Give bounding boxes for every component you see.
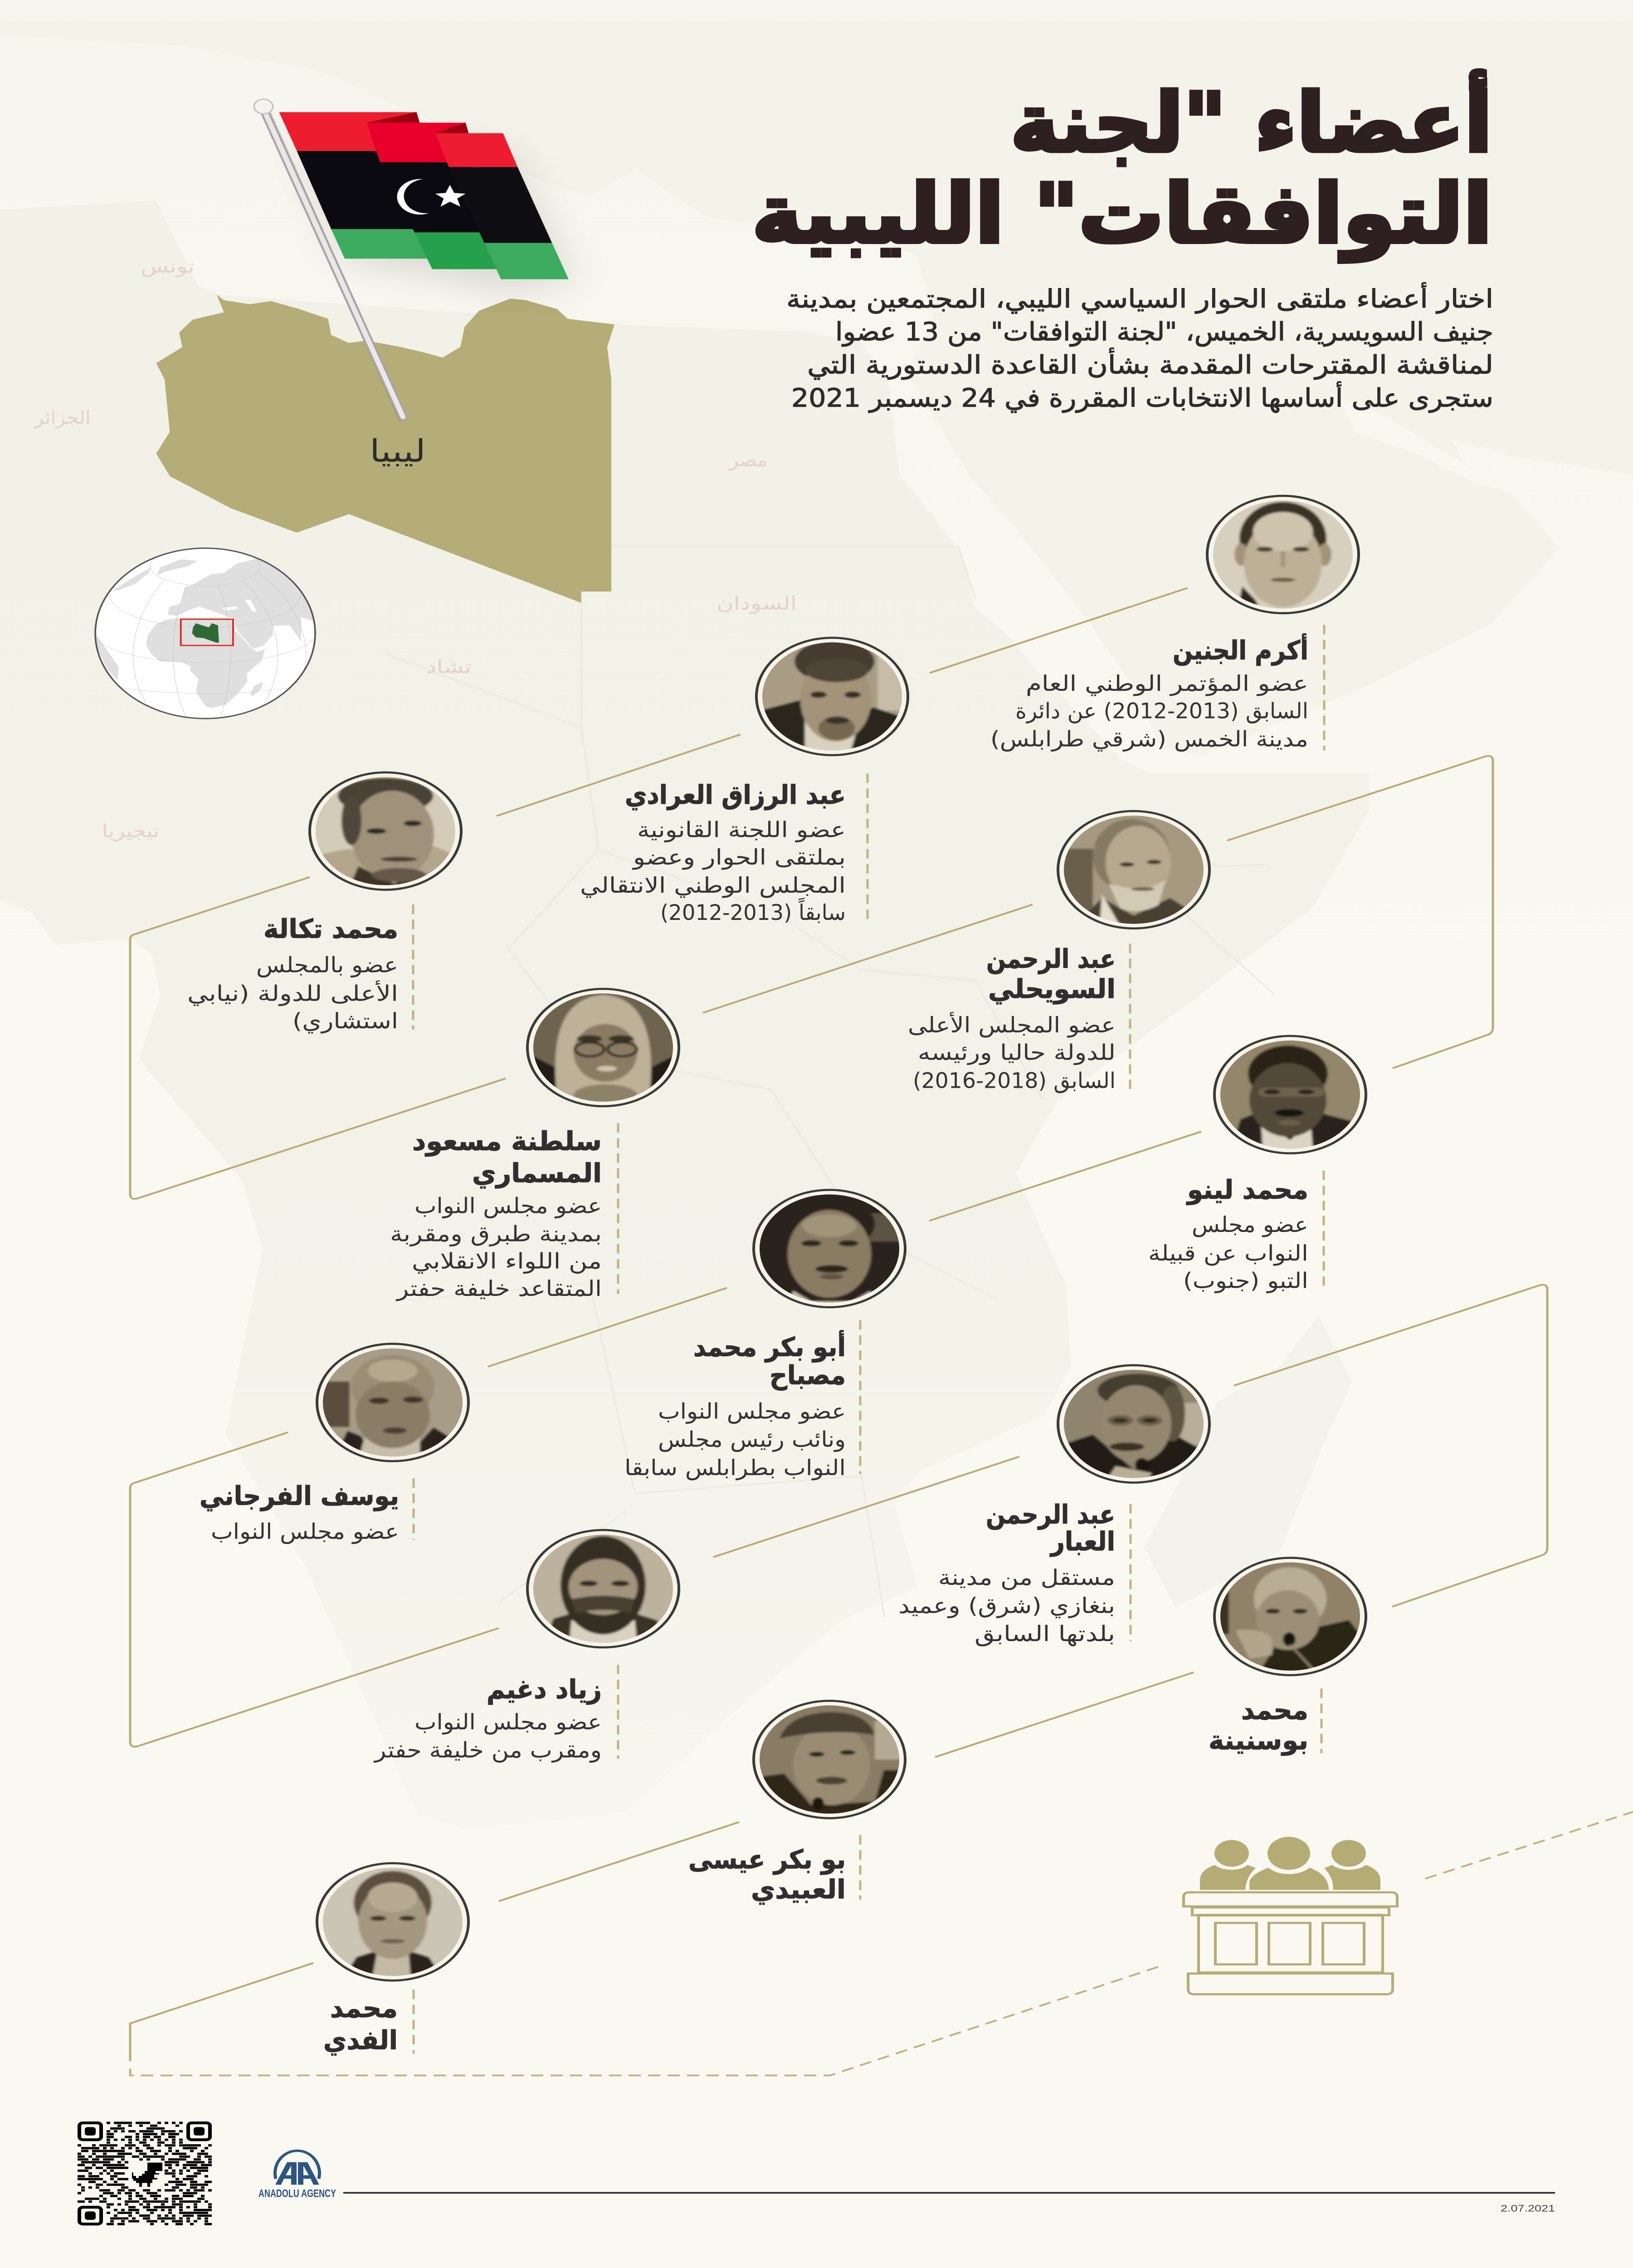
connector line 1 (930, 588, 1188, 673)
dashed divider (1129, 943, 1131, 1093)
map country labels: السودان (717, 592, 797, 614)
description: بلدتها السابق (975, 1621, 1115, 1647)
description (908, 1012, 1116, 1094)
portrait: Akram (1207, 496, 1359, 613)
name: العبيدي (751, 1874, 846, 1905)
description: النواب عن قبيلة (1148, 1241, 1308, 1266)
map country labels: تشاد (426, 656, 472, 677)
name: محمد تكالة (263, 914, 398, 944)
logo: Anadolu Agency: ANADOLU AGENCY (258, 2187, 336, 2200)
dashed divider (866, 773, 869, 924)
intro paragraph: جنيف السويسرية، الخميس، "لجنة التوافقات" من 13 عضوا (835, 318, 1493, 347)
description: مدينة الخمس (شرقي طرابلس) (990, 726, 1308, 752)
name: بوسنينة (1209, 1725, 1308, 1756)
label: Libya: ليبيا (370, 433, 426, 469)
intro paragraph: ستجرى على أساسها الانتخابات المقررة في 24 ديسمبر 2021 (791, 381, 1493, 413)
connector line 4 (703, 904, 1033, 1013)
name: أكرم الجنين (1173, 633, 1308, 666)
date: 2.07.2021 (1501, 2203, 1555, 2214)
Libya map (156, 294, 614, 603)
dashed line to page edge (1425, 1812, 1633, 1879)
description: عضو مجلس (1192, 1212, 1308, 1237)
description: النواب بطرابلس سابقا (624, 1455, 846, 1481)
name: زياد دغيم (487, 1674, 602, 1705)
description: بنغازي (شرق) وعميد (898, 1593, 1115, 1618)
description: المجلس الوطني الانتقالي (580, 873, 846, 898)
footer rule (343, 2192, 1555, 2194)
description: المتقاعد خليفة حفتر (395, 1276, 602, 1301)
portrait: Bosnina (1214, 1558, 1366, 1675)
description: بمدينة طبرق ومقربة (390, 1221, 602, 1246)
description: عضو اللجنة القانونية (637, 817, 846, 842)
name: عبد الرحمن (986, 1500, 1115, 1530)
intro paragraph (786, 282, 1493, 413)
member 3 (187, 772, 461, 1033)
portrait: Abbar (1058, 1365, 1209, 1483)
description (187, 952, 398, 1033)
name: الفدي (323, 2025, 398, 2055)
dashed divider (1321, 1688, 1322, 1753)
connector line 8 with left bracket (130, 1432, 499, 1747)
member 6 (1148, 1036, 1366, 1293)
dashed divider (1129, 1504, 1132, 1641)
name: مصباح (770, 1360, 846, 1390)
title (752, 70, 1492, 262)
member 5 (390, 989, 679, 1301)
description: عضو المؤتمر الوطني العام (1026, 671, 1308, 696)
description (373, 1709, 602, 1763)
portrait: Farjani (317, 1344, 468, 1461)
intro paragraph: لمناقشة المقترحات المقدمة بشأن القاعدة الدستورية التي (807, 347, 1493, 380)
connector line 13 (130, 1963, 313, 2061)
name (688, 1844, 846, 1905)
map country labels: تونس (141, 256, 195, 278)
name: بو بكر عيسى (688, 1844, 846, 1875)
portrait: Abdulrazzaq (756, 638, 908, 755)
name (412, 1126, 602, 1188)
member 13 (317, 1863, 468, 2055)
map country labels: الجزائر (34, 407, 91, 429)
name (693, 1330, 846, 1390)
name: محمد (330, 1993, 398, 2024)
dashed divider (859, 1320, 862, 1474)
logo: Anadolu Agency (258, 2151, 336, 2200)
description: للدولة حاليا ورئيسه (918, 1040, 1116, 1065)
Libyan flag on pole (254, 99, 573, 420)
description: عضو مجلس النواب (658, 1398, 846, 1424)
member 7 (624, 1190, 905, 1481)
name (1209, 1695, 1308, 1756)
member 2 (580, 638, 908, 925)
portrait: Misbah (754, 1190, 905, 1307)
dashed closing line (130, 1967, 1158, 2075)
portrait: Fadi (317, 1863, 468, 1980)
dashed divider (1323, 625, 1325, 751)
description: مستقل من مدينة (938, 1565, 1115, 1590)
connector line 2 (497, 734, 741, 816)
connector line 11 (935, 1672, 1194, 1757)
name (986, 1500, 1115, 1557)
portrait: Daghim (527, 1530, 679, 1647)
name: المسماري (472, 1158, 602, 1188)
title: أعضاء "لجنة (1010, 70, 1492, 171)
description: استشاري) (292, 1008, 398, 1033)
portrait: Suwaihli (1058, 811, 1209, 929)
Libya highlight (192, 623, 219, 643)
connector line 9 (713, 1457, 1019, 1557)
icon: committee at podium (1184, 1837, 1397, 1994)
dashed divider (617, 1665, 619, 1759)
member 9 (898, 1365, 1209, 1647)
dashed divider (413, 1989, 414, 2053)
member 12 (688, 1701, 905, 1905)
description: من اللواء الانقلابي (412, 1249, 602, 1274)
description (898, 1565, 1115, 1647)
description: السابق (2013-2012) عن دائرة (1015, 698, 1308, 724)
connector line 7 (488, 1288, 727, 1367)
connector line 12 (499, 1822, 739, 1901)
dashed divider (859, 1835, 862, 1900)
name: العبار (1050, 1526, 1115, 1557)
member 8 (200, 1344, 468, 1544)
member 10 (373, 1530, 679, 1763)
description (390, 1193, 602, 1301)
description: سابقاً (2013-2012) (660, 897, 846, 925)
map country labels (34, 256, 797, 842)
intro paragraph: اختار أعضاء ملتقى الحوار السياسي الليبي، المجتمعين بمدينة (786, 282, 1493, 314)
portrait: Takala (310, 772, 461, 890)
member 11 (1209, 1558, 1366, 1756)
description: عضو مجلس النواب (414, 1193, 602, 1218)
description: ونائب رئيس مجلس (658, 1427, 846, 1452)
QR code (78, 2123, 212, 2224)
portrait: Masmari (527, 989, 679, 1106)
description: ومقرب من خليفة حفتر (373, 1737, 602, 1763)
portrait: Ubaidi (754, 1701, 905, 1818)
name: سلطنة مسعود (412, 1126, 602, 1157)
dashed divider (413, 1478, 414, 1540)
icon: dinosaur (132, 2163, 162, 2187)
portrait: Lino (1214, 1036, 1366, 1154)
member 1 (990, 496, 1359, 752)
description: التبو (جنوب) (1183, 1268, 1308, 1293)
description: عضو مجلس النواب (414, 1709, 602, 1735)
member 4 (908, 811, 1209, 1094)
name: محمد (1241, 1695, 1308, 1725)
description: عضو مجلس النواب (211, 1519, 399, 1544)
connector line 5 with right bracket (1227, 756, 1493, 1068)
name (986, 944, 1116, 1005)
dashed divider (412, 904, 414, 1030)
map country labels: مصر (728, 450, 768, 471)
name (323, 1993, 398, 2055)
connector line 6 (929, 1132, 1201, 1221)
name: محمد لينو (1186, 1175, 1308, 1205)
globe locator (95, 547, 315, 719)
description (580, 817, 846, 925)
dashed divider (1322, 1171, 1325, 1289)
red locator box (181, 619, 233, 645)
description: بملتقى الحوار وعضو (632, 845, 846, 870)
description: عضو المجلس الأعلى (908, 1012, 1116, 1037)
map country labels: نيجيريا (102, 820, 159, 842)
name: أبو بكر محمد (693, 1330, 846, 1363)
description (990, 671, 1308, 752)
description: عضو بالمجلس (256, 952, 398, 978)
connector line 10 with right bracket (1234, 1285, 1547, 1607)
dashed divider (617, 1123, 619, 1294)
description: السابق (2018-2016) (913, 1068, 1116, 1094)
name: السويحلي (988, 974, 1116, 1005)
description (624, 1398, 846, 1481)
connector line 3 with left bracket (130, 877, 506, 1199)
name: يوسف الفرجاني (200, 1481, 399, 1511)
description: الأعلى للدولة (نيابي (187, 980, 398, 1006)
name: عبد الرحمن (986, 944, 1116, 974)
description (1148, 1212, 1308, 1293)
name: عبد الرزاق العرادي (625, 780, 846, 810)
